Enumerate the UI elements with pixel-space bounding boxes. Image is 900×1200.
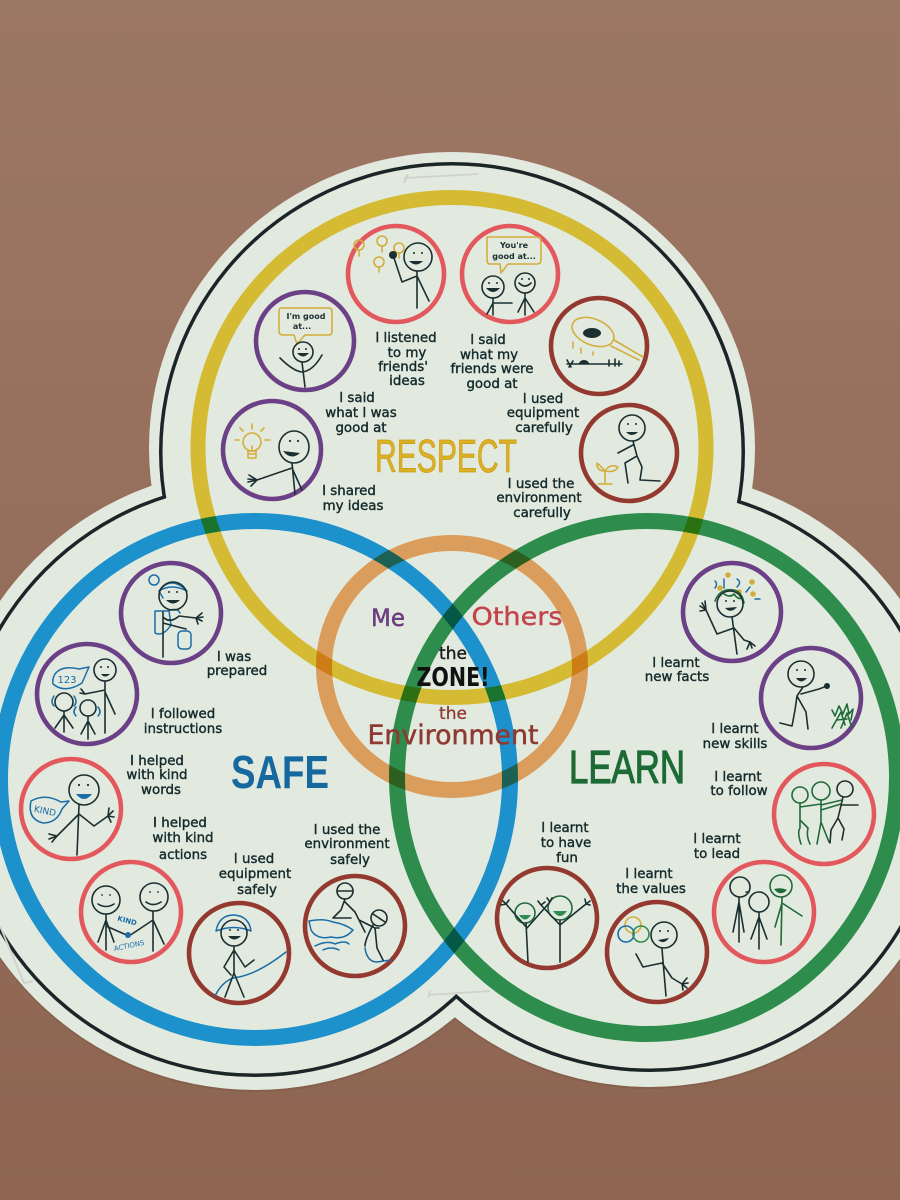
captions: respect: to my: [388, 346, 426, 361]
captions: safe: words: [141, 783, 181, 798]
captions: learn: I learnt: [714, 770, 762, 785]
captions: respect: I said: [339, 391, 375, 406]
captions: respect: I shared: [322, 484, 376, 499]
captions: learn: I learnt: [625, 867, 673, 882]
captions: safe: I was: [217, 650, 251, 665]
captions: learn: new facts: [645, 670, 709, 685]
icon: followed instructions: 123: [57, 675, 77, 686]
captions: respect: what I was: [325, 406, 397, 421]
captions: respect: good at: [335, 421, 387, 436]
icon: said what friends were good at: good at...: [492, 252, 536, 261]
icon: followed instructions: [37, 644, 137, 744]
captions: respect: carefully: [515, 421, 573, 436]
icon: learnt the values: [607, 902, 707, 1002]
heading: RESPECT: RESPECT: [375, 430, 517, 482]
staples: [0, 174, 490, 998]
captions: respect: I used: [523, 392, 563, 407]
icon: used the environment carefully: [581, 405, 677, 501]
captions: safe: safely: [330, 853, 370, 868]
captions: safe: with kind: [126, 768, 188, 783]
icon: learnt new facts: [683, 563, 781, 661]
captions: learn: I learnt: [541, 821, 589, 836]
captions: safe: I helped: [153, 816, 207, 831]
captions: safe: prepared: [207, 664, 267, 679]
centre labels: ZONE!: [416, 663, 490, 693]
centre labels: the: [439, 644, 467, 664]
captions: safe: equipment: [219, 867, 291, 882]
icon: used equipment safely: [189, 903, 289, 1003]
captions: respect: good at: [466, 377, 518, 392]
centre labels: [368, 602, 562, 751]
icon: learnt to lead: [714, 862, 814, 962]
captions: respect: friends': [378, 360, 428, 375]
captions: respect: ideas: [389, 374, 425, 389]
captions: respect: what my: [460, 348, 518, 363]
icon: helped with kind actions: ACTIONS: [113, 939, 146, 953]
captions: respect: carefully: [513, 506, 571, 521]
captions: safe: instructions: [144, 722, 222, 737]
captions: learn: [541, 656, 768, 897]
captions: learn: the values: [616, 882, 686, 897]
captions: respect: I listened: [375, 331, 437, 346]
centre labels: the: [439, 704, 467, 724]
captions: safe: I used: [234, 852, 274, 867]
captions: respect: [322, 331, 582, 521]
captions: respect: environment: [496, 491, 582, 506]
captions: safe: [126, 650, 390, 898]
icon: learnt to have fun: [497, 868, 597, 968]
icon: said what I was good at: [256, 292, 354, 390]
captions: learn: I learnt: [693, 832, 741, 847]
captions: safe: safely: [237, 883, 277, 898]
icon: learnt to follow: [774, 764, 874, 864]
icon: helped with kind actions: KIND: [116, 915, 138, 927]
captions: learn: I learnt: [711, 722, 759, 737]
venn rings: respect yellow, safe blue, learn green, zone orange: [0, 198, 897, 1038]
icon: said what friends were good at: You're: [499, 241, 529, 250]
centre labels: Environment: [368, 720, 538, 751]
captions: respect: friends were: [450, 362, 534, 377]
heading: SAFE: SAFE: [231, 746, 329, 798]
icon: helped with kind actions: [81, 862, 181, 962]
icon: used equipment carefully: [551, 298, 647, 394]
paper card with outline: [0, 152, 900, 1092]
icon: said what friends were good at: [462, 226, 558, 322]
captions: respect: I used the: [508, 477, 574, 492]
icon: listened to friends' ideas: [348, 226, 444, 322]
centre labels: Others: [472, 602, 562, 631]
icon: said what I was good at: at...: [293, 322, 311, 331]
captions: learn: I learnt: [652, 656, 700, 671]
captions: learn: to have: [541, 836, 591, 851]
captions: respect: my ideas: [323, 499, 383, 514]
captions: safe: I followed: [151, 707, 215, 722]
icon: used the environment safely: [305, 876, 405, 976]
captions: learn: fun: [556, 851, 578, 866]
captions: respect: equipment: [507, 406, 579, 421]
centre labels: Me: [371, 604, 405, 632]
icon: was prepared: [121, 563, 221, 663]
icon: helped with kind words: KIND: [33, 805, 57, 819]
icon: shared my ideas: [223, 401, 321, 499]
captions: learn: new skills: [703, 737, 767, 752]
heading: LEARN: LEARN: [569, 741, 685, 793]
icon: helped with kind words: [21, 759, 121, 859]
captions: safe: with kind: [152, 831, 214, 846]
captions: learn: to follow: [710, 784, 768, 799]
captions: respect: I said: [470, 333, 506, 348]
captions: safe: I helped: [130, 754, 184, 769]
captions: safe: actions: [159, 848, 207, 863]
captions: learn: to lead: [694, 847, 740, 862]
captions: safe: environment: [304, 837, 390, 852]
icon: learnt new skills: [761, 648, 861, 748]
icon: said what I was good at: I'm good: [286, 312, 326, 321]
captions: safe: I used the: [314, 823, 380, 838]
